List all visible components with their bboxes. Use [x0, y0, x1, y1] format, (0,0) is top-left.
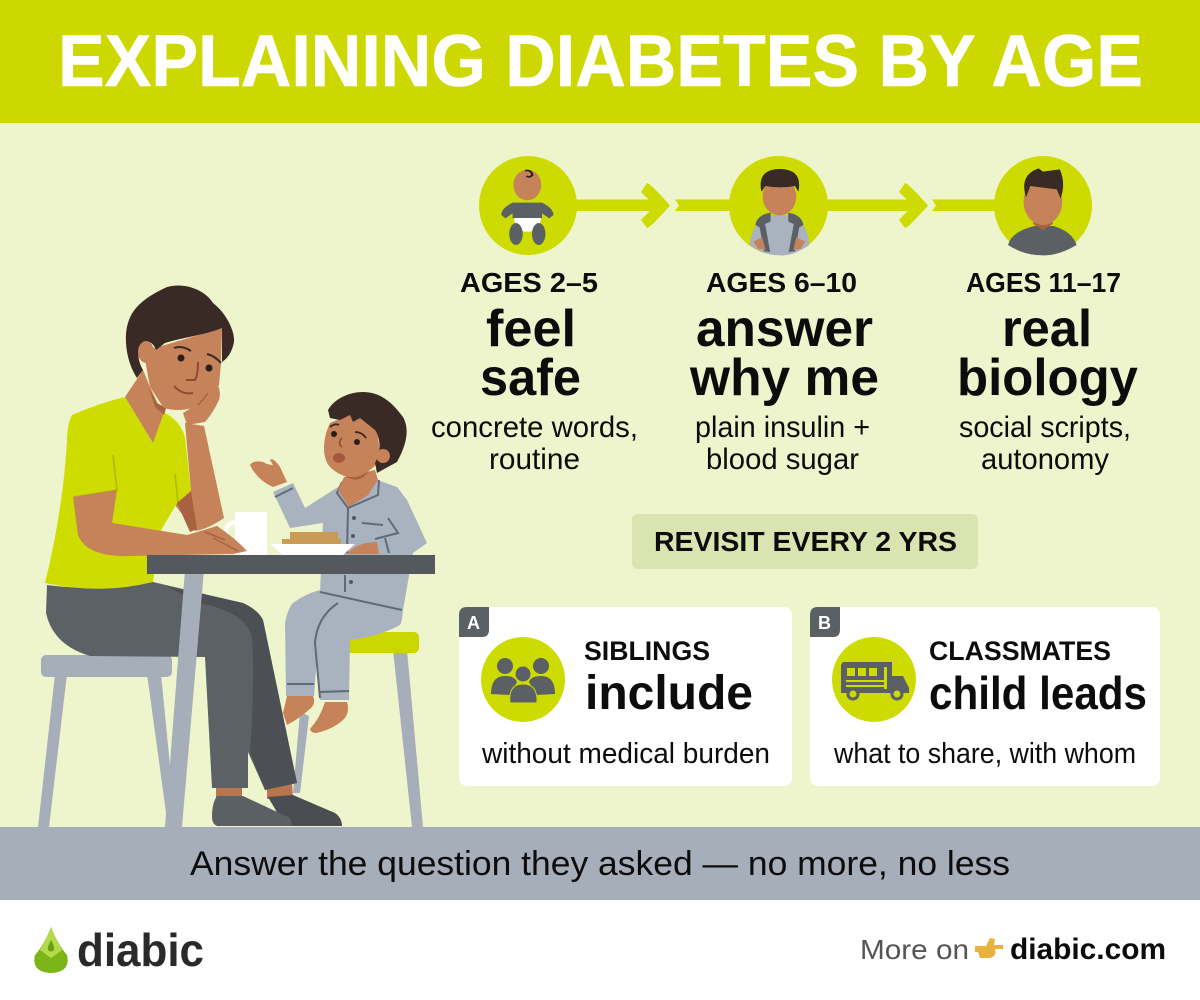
column: ages 6–10 [689, 267, 879, 476]
card B: classmates [810, 607, 1160, 786]
child neck [338, 470, 378, 507]
card B: classmates: what to share, with whom [833, 738, 1136, 770]
column: ages 2–5: routine [489, 443, 580, 476]
column: ages 11–17: social scripts, [959, 411, 1131, 444]
column: ages 11–17: AGES 11–17 [966, 267, 1121, 298]
cup [226, 512, 267, 555]
column: ages 11–17: autonomy [981, 443, 1109, 476]
column: ages 11–17: real [1002, 300, 1092, 358]
parent shirt [45, 397, 191, 589]
icon: pointing hand [975, 938, 1003, 958]
bottom message band [0, 827, 1200, 900]
table leg [165, 570, 204, 827]
parent near arm and hand [73, 490, 247, 556]
parent hand at chin [183, 380, 220, 425]
icon: drop [34, 927, 68, 973]
table [147, 555, 435, 574]
badge B [810, 607, 840, 637]
card A: siblings [459, 607, 792, 786]
child raised hand [250, 459, 287, 487]
badge A [459, 607, 489, 637]
column: ages 6–10: blood sugar [706, 443, 859, 476]
card B: classmates: CLASSMATES [929, 636, 1111, 666]
parent stool [38, 655, 176, 827]
column: ages 11–17: biology [957, 349, 1138, 407]
child head [324, 392, 407, 477]
column: ages 2–5: AGES 2–5 [460, 267, 598, 298]
column: ages 2–5 [431, 267, 638, 476]
footer link [860, 933, 1166, 966]
column: ages 2–5: safe [480, 349, 581, 407]
badge A: A [467, 613, 480, 633]
child pajama top [273, 480, 427, 610]
icon: teen [994, 156, 1092, 255]
plate [270, 544, 355, 555]
toast [282, 532, 341, 545]
parent shoes [212, 795, 342, 826]
revisit callout [632, 514, 978, 569]
arrow 2 [822, 183, 1000, 228]
column: ages 2–5: concrete words, [431, 411, 638, 444]
footer link: More on [860, 934, 969, 965]
key message: Answer the question they asked — no more, no less [190, 845, 1010, 883]
parent neck [125, 370, 166, 443]
header banner [0, 0, 1200, 123]
parent ankles [216, 783, 293, 799]
column: ages 6–10: answer [696, 300, 873, 358]
icon: school child [729, 156, 828, 255]
parent far arm shadow [177, 491, 197, 532]
icon: group of people [481, 637, 565, 722]
child near hand [347, 542, 379, 554]
child feet [283, 696, 348, 733]
column: ages 2–5: feel [486, 300, 576, 358]
card A: siblings: include [585, 667, 753, 720]
arrow 1 [570, 183, 735, 228]
card A: siblings: without medical burden [481, 738, 770, 770]
footer link: diabic.com [1010, 933, 1166, 966]
child pajama trousers [285, 590, 403, 700]
footer logo: diabic [77, 924, 204, 976]
badge B: B [818, 613, 831, 633]
child stool [293, 632, 423, 827]
column: ages 6–10: AGES 6–10 [706, 267, 857, 298]
column: ages 6–10: why me [689, 349, 879, 407]
column: ages 11–17 [957, 267, 1138, 476]
revisit callout: REVISIT EVERY 2 YRS [654, 526, 957, 557]
age timeline [479, 156, 1092, 255]
column: ages 6–10: plain insulin + [695, 411, 870, 444]
illustration: parent and child at table [38, 285, 435, 827]
parent trousers [46, 582, 297, 790]
card B: classmates: child leads [929, 667, 1147, 719]
parent head [126, 285, 234, 410]
icon: school bus [832, 637, 916, 722]
icon: baby [479, 156, 577, 255]
title: EXPLAINING DIABETES BY AGE [58, 21, 1143, 102]
card A: siblings: SIBLINGS [584, 636, 710, 666]
parent far arm [175, 423, 224, 531]
